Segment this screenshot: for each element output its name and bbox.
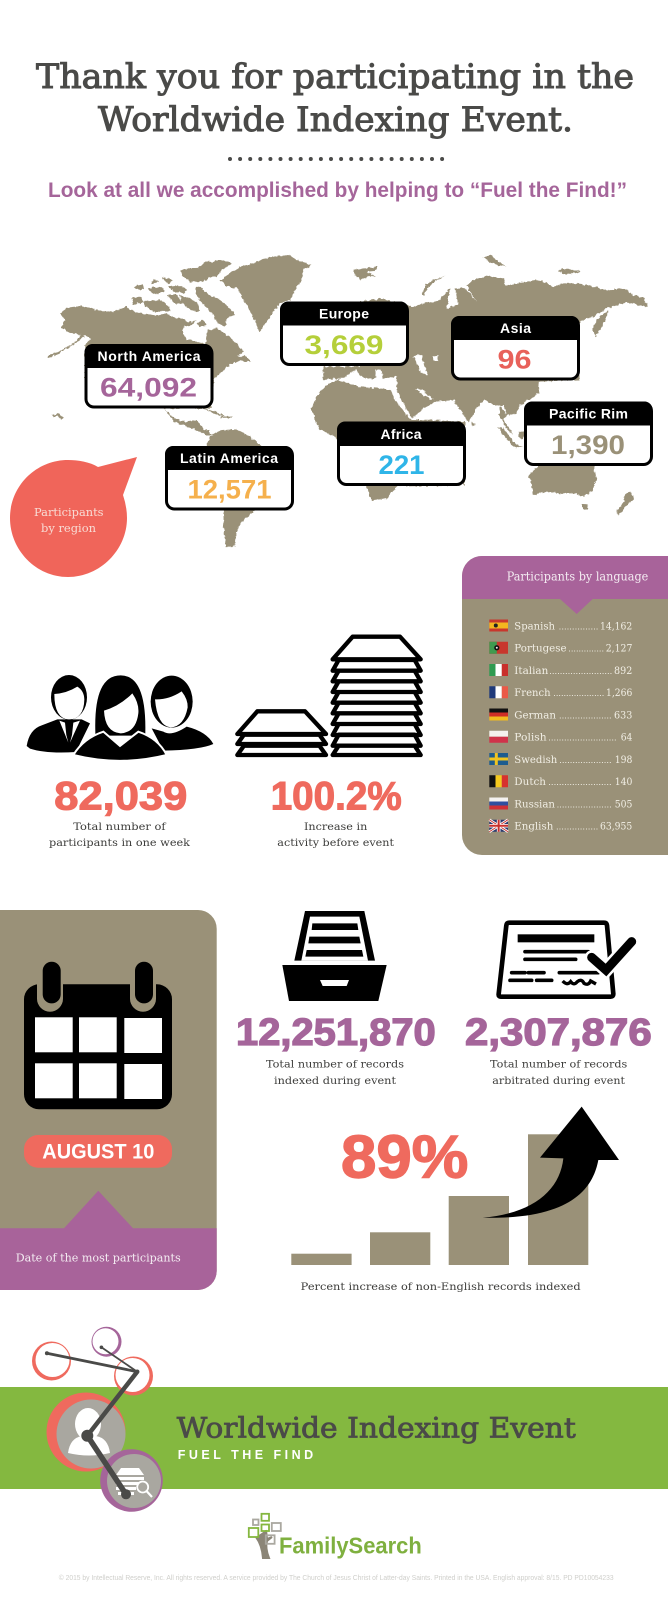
- stat: activity increase: [271, 774, 402, 849]
- row: Dutch: [514, 776, 632, 788]
- map: Eurasia, Africa and Oceania: [312, 255, 648, 515]
- title: [36, 57, 634, 140]
- footer banner: Worldwide Indexing Event: [177, 1411, 577, 1444]
- clock hands: [45, 1346, 137, 1499]
- flag: Germany: [489, 708, 508, 720]
- footer banner: [0, 1387, 668, 1489]
- region box: North America: North America: [98, 348, 201, 364]
- row: Russian: 505: [615, 798, 632, 810]
- flag: Spain: [489, 620, 508, 632]
- row: Polish: [514, 732, 633, 744]
- row: Portugese: [514, 642, 632, 654]
- small purple ring: [92, 1327, 122, 1357]
- region box: Europe: 3,669: [304, 330, 384, 360]
- bar chart: non-English records: [291, 1134, 588, 1265]
- title: Worldwide Indexing Event.: [98, 100, 573, 140]
- caption: Date of the most participants: [16, 1251, 181, 1265]
- row: Spanish: ...............: [559, 621, 598, 631]
- purple record circle: [100, 1449, 163, 1512]
- subtitle: Look at all we accomplished by helping to “Fuel the Find!”: [48, 179, 627, 202]
- row: Italian: 892: [614, 665, 632, 677]
- row: English: English: [514, 820, 554, 832]
- flag: Poland: [489, 731, 508, 743]
- stat: records arbitrated: Total number of records: [490, 1059, 627, 1071]
- row: Polish: 64: [621, 732, 633, 744]
- panel: participants by language: [462, 556, 668, 855]
- stat: activity increase: Increase in: [304, 821, 368, 833]
- flag: Italy: [489, 664, 508, 676]
- panel: date of most participants: [0, 910, 217, 1290]
- row: Swedish: ....................: [559, 755, 612, 765]
- region box: North America: 64,092: [100, 372, 197, 402]
- row: Russian: .....................: [557, 799, 612, 809]
- region box: Pacific Rim: Pacific Rim: [549, 406, 628, 422]
- row: French: 1,266: [606, 687, 633, 699]
- flag: Sweden: [489, 753, 508, 765]
- row: French: French: [514, 687, 551, 699]
- icon: three people: [27, 674, 213, 761]
- callout: participants by region: Participants: [34, 505, 104, 519]
- row: Swedish: 198: [615, 754, 632, 766]
- stat: total participants: Total number of: [73, 821, 167, 833]
- stat: records indexed: 12,251,870: [236, 1012, 436, 1054]
- region box: Africa: Africa: [380, 426, 422, 442]
- row: Portugese: ..............: [568, 644, 604, 654]
- row: German: ....................: [559, 710, 612, 720]
- flag: Russia: [489, 798, 508, 810]
- stat: records arbitrated: arbitrated during event: [492, 1075, 626, 1087]
- FamilySearch logo: [249, 1514, 422, 1558]
- date pill: AUGUST 10: [42, 1140, 154, 1163]
- row: French: ....................: [553, 688, 604, 698]
- stat: activity increase: 100.2%: [271, 774, 402, 818]
- stat: activity increase: activity before event: [277, 837, 395, 849]
- stat: records indexed: [236, 1012, 436, 1087]
- row: Italian: Italian: [514, 665, 549, 677]
- large person circle: [46, 1392, 126, 1472]
- row: Portugese: Portugese: [514, 642, 567, 654]
- icon: document with check mark: [499, 923, 632, 997]
- row: Dutch: Dutch: [514, 776, 546, 788]
- row: Dutch: ........................: [548, 777, 612, 787]
- row: Italian: ........................: [549, 666, 612, 676]
- stat: total participants: participants in one week: [49, 837, 191, 849]
- row: English: 63,955: [600, 820, 632, 832]
- row: German: [514, 709, 632, 721]
- region box: Europe: [280, 302, 408, 364]
- stat: records arbitrated: [465, 1012, 652, 1087]
- row: Polish: Polish: [514, 732, 547, 744]
- panel: participants by language: Participants by language: [507, 570, 648, 584]
- row: German: 633: [614, 709, 632, 721]
- row: Italian: [514, 665, 632, 677]
- caption: non-English records: Percent increase of non-English records indexed: [301, 1281, 581, 1293]
- row: Russian: [514, 798, 632, 810]
- region box: Latin America: Latin America: [180, 450, 278, 466]
- row: Spanish: [514, 620, 632, 632]
- wordmark: FamilySearch: [279, 1532, 422, 1558]
- row: English: ................: [556, 822, 598, 832]
- small red ring left: [32, 1342, 71, 1380]
- icon: paper stacks: [237, 637, 421, 755]
- icon: file drawer: [282, 911, 387, 1001]
- row: Swedish: Swedish: [514, 754, 558, 766]
- region box: Europe: Europe: [319, 306, 369, 322]
- icon: calendar: [24, 959, 172, 1109]
- region box: Africa: 221: [378, 450, 424, 480]
- arrow: upward trend: [483, 1107, 619, 1218]
- world map: [47, 255, 648, 547]
- date pill: [24, 1135, 172, 1168]
- region box: Africa: [337, 422, 466, 484]
- row: Russian: Russian: [514, 798, 555, 810]
- flag: Portugal: [489, 642, 508, 654]
- callout: participants by region: by region: [41, 521, 97, 535]
- row: Spanish: Spanish: [514, 620, 555, 632]
- stat: records arbitrated: 2,307,876: [465, 1012, 652, 1054]
- row: Spanish: 14,162: [600, 620, 632, 632]
- region box: Asia: Asia: [500, 320, 531, 336]
- dotted separator: [230, 157, 443, 161]
- region box: Asia: 96: [498, 344, 532, 374]
- stat: total participants: 82,039: [54, 774, 187, 818]
- region box: North America: [84, 344, 213, 407]
- region box: Pacific Rim: 1,390: [551, 430, 625, 460]
- title: Thank you for participating in the: [36, 57, 634, 97]
- stat: 89 percent: 89%: [341, 1123, 468, 1190]
- stat: total participants: [49, 774, 191, 849]
- row: French: [514, 687, 633, 699]
- small red ring right: [114, 1356, 153, 1396]
- flag: United Kingdom: [489, 820, 508, 832]
- stat: records indexed: indexed during event: [274, 1075, 397, 1087]
- region box: Latin America: [165, 446, 294, 509]
- map: Americas and Greenland: [47, 255, 312, 547]
- row: Swedish: [514, 754, 632, 766]
- flag: France: [489, 686, 508, 698]
- region box: Asia: [451, 316, 580, 379]
- copyright: © 2015 by Intellectual Reserve, Inc. All rights reserved. A service provided by The Church of Jesus Christ of Latter-day Saints. Printed in the USA. English approval: 8/15. PD PD10054233: [59, 1573, 614, 1582]
- row: Polish: ..........................: [548, 732, 617, 742]
- tree: [249, 1514, 281, 1558]
- stat: records indexed: Total number of records: [266, 1059, 404, 1071]
- footer banner: FUEL THE FIND: [178, 1448, 313, 1462]
- region box: Latin America: 12,571: [188, 474, 272, 504]
- row: German: German: [514, 709, 556, 721]
- row: English: [514, 820, 632, 832]
- callout: participants by region: [10, 457, 137, 577]
- flag: Belgium: [489, 775, 508, 787]
- logo graphic: circles and clock hands: [32, 1327, 163, 1512]
- row: Portugese: 2,127: [606, 642, 632, 654]
- region box: Pacific Rim: [524, 402, 652, 464]
- row: Dutch: 140: [615, 776, 632, 788]
